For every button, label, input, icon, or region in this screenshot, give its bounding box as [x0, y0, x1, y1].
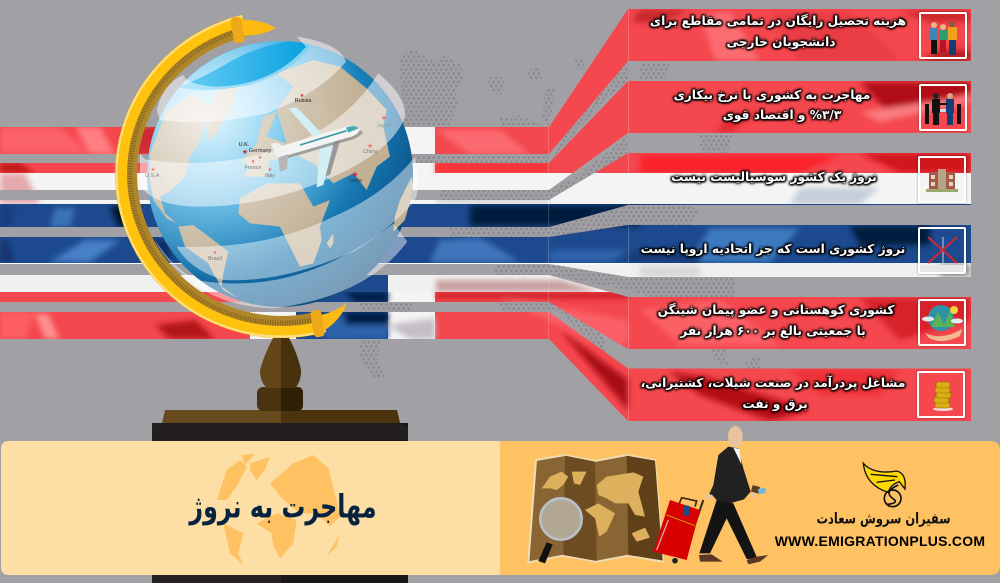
panel: not socialist	[669, 154, 968, 204]
globe meridian ring	[115, 14, 347, 338]
icon: world hemispheres behind title	[217, 454, 340, 565]
city labels: U.S.A.	[145, 173, 161, 179]
panel: mountainous Schengen member	[655, 298, 968, 348]
city labels: Japan	[376, 123, 392, 129]
panel: bottom logo background	[500, 441, 1000, 575]
company name: سفیران سروش سعادت	[817, 510, 950, 528]
city labels: India	[350, 178, 363, 184]
city labels: ★	[251, 159, 256, 165]
dotted world map background	[360, 50, 760, 378]
text: migration and unemployment: مهاجرت به کشوری با نرخ بیکاری	[674, 88, 870, 102]
icon: nature in hand	[918, 299, 966, 346]
city labels: Russia	[295, 98, 312, 104]
city labels	[145, 93, 392, 262]
city labels: U.K.	[239, 142, 250, 148]
city labels: China	[363, 149, 378, 155]
panel: bottom title background	[1, 441, 500, 575]
city labels: ★	[381, 114, 387, 122]
translucent latitude bands	[140, 37, 418, 308]
text: mountainous Schengen member: کشوری کوهستانی و عضو پیمان شینگن	[658, 303, 894, 317]
icon: gold coins	[917, 371, 965, 418]
text: high-income jobs: مشاغل پردرآمد در صنعت شیلات، کشتیرانی،	[641, 376, 905, 390]
city labels: ★	[300, 93, 305, 99]
icon: crossed out EU flag	[918, 227, 966, 274]
icon: business handshake	[919, 84, 967, 131]
city labels: ★	[258, 155, 263, 161]
icon: walking businessman	[699, 426, 768, 564]
airplane	[271, 107, 363, 187]
panel: free tuition	[648, 10, 968, 60]
text: strong economy: %۳/۳ و اقتصاد قوی	[723, 108, 841, 122]
city labels: Brazil	[208, 256, 222, 262]
city labels: ★	[213, 250, 218, 256]
panel: not in European Union	[638, 226, 968, 276]
text: population: با جمعیتی بالغ بر ۶۰۰ هزار نفر	[680, 324, 866, 338]
continents	[147, 40, 413, 307]
text: not in European Union: نروژ کشوری است که جز اتحادیه اروپا نیست	[641, 242, 905, 256]
text: not socialist: نروژ یک کشور سوسیالیست نیست	[671, 170, 877, 184]
city labels: ★	[367, 142, 373, 150]
icon: government building	[918, 156, 966, 203]
text: power and oil: برق و نفت	[742, 397, 808, 411]
icon: three students	[919, 12, 967, 59]
text: free tuition: هزینه تحصیل رایگان در تمامی مقاطع برای	[650, 14, 906, 28]
text: foreign students: دانشجویان خارجی	[726, 35, 836, 49]
city labels: ★	[351, 170, 359, 179]
icon: folded treasure map with magnifier	[528, 455, 663, 563]
panel: low unemployment	[672, 82, 968, 132]
flag ribbons	[0, 0, 1000, 430]
city labels: ★	[268, 167, 273, 173]
globe	[140, 37, 418, 308]
city labels: ★	[242, 148, 248, 156]
panel: high-income jobs	[638, 370, 966, 420]
city labels: Germany	[249, 148, 272, 154]
icon: company logo bird	[863, 463, 905, 507]
icon: suitcase	[653, 498, 703, 564]
website address: WWW.EMIGRATIONPLUS.COM	[775, 533, 985, 549]
title: مهاجرت به نروژ	[189, 489, 377, 526]
city labels: ★	[151, 167, 156, 173]
city labels: Italy	[265, 173, 275, 179]
city labels: France	[244, 165, 262, 171]
globe stand	[152, 338, 408, 583]
